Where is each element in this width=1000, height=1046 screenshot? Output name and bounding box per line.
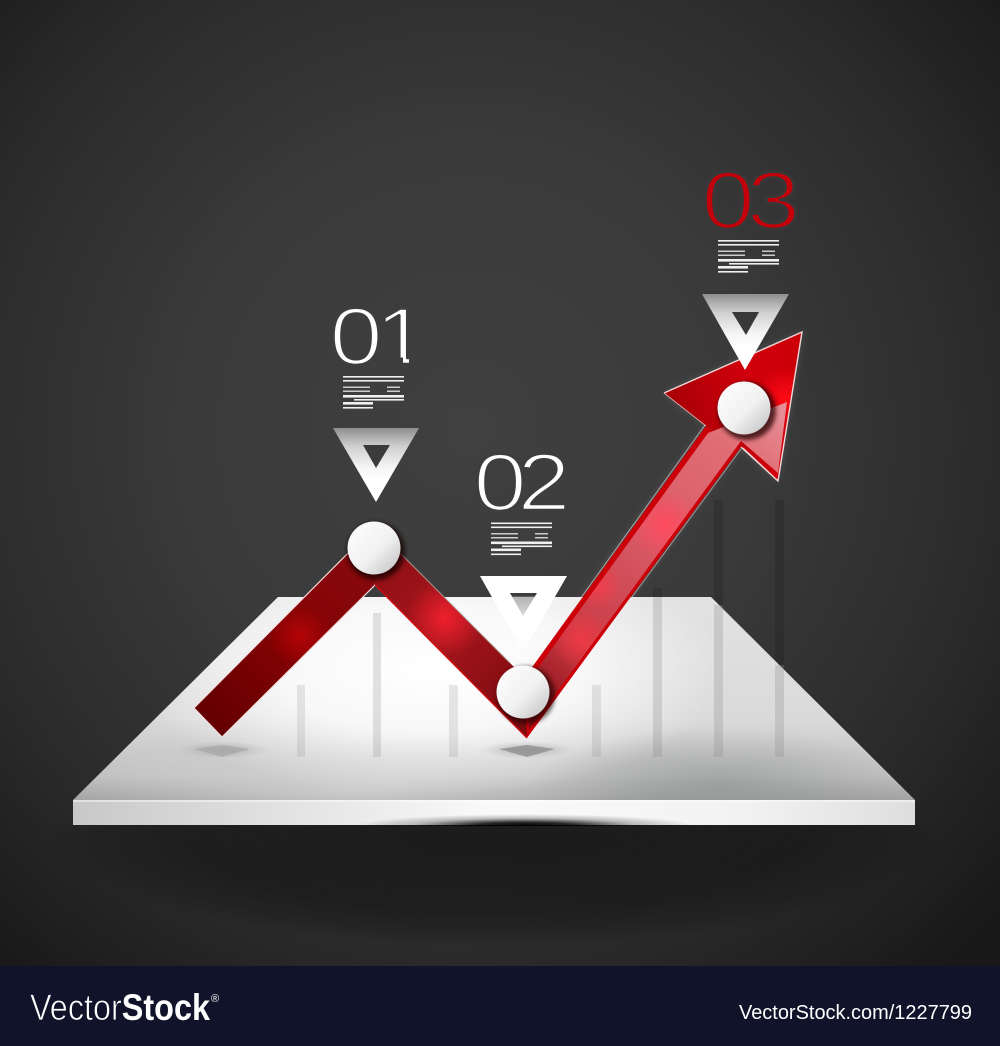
segment 2 — [374, 527, 530, 738]
placeholder text block 03 — [718, 240, 779, 273]
footer bar — [0, 966, 1000, 1046]
platform top surface — [73, 597, 915, 800]
arrow floor shadows — [174, 741, 575, 759]
number 02: 02 — [474, 437, 571, 527]
segment 3 shaft and glass pane on head — [525, 402, 787, 738]
platform front edge — [73, 800, 915, 825]
node ball 1 — [347, 522, 405, 580]
placeholder text block 02 — [491, 522, 552, 555]
node ball 2 — [496, 666, 555, 724]
chart bars on platform — [297, 597, 784, 757]
red zigzag arrow — [194, 332, 802, 738]
footer logo: VectorStock — [30, 987, 210, 1028]
platform — [73, 597, 915, 826]
triangle marker 02 — [480, 576, 567, 652]
number 01: 01 — [329, 291, 428, 381]
segment 1 — [194, 527, 390, 737]
soft glow around rising arrow — [527, 332, 802, 738]
placeholder text block 01 — [343, 376, 404, 409]
shadow under platform — [40, 825, 950, 950]
arrow head — [664, 332, 802, 481]
triangle marker 03 — [702, 294, 789, 370]
background bars above platform — [653, 500, 784, 665]
footer registered mark: ® — [211, 993, 219, 1005]
triangle marker 01 — [333, 428, 419, 502]
footer image id: VectorStock.com/1227799 — [739, 1002, 972, 1024]
node ball 3 — [718, 382, 776, 440]
platform front contact shadow — [355, 813, 695, 826]
number 03: 03 — [702, 155, 800, 245]
